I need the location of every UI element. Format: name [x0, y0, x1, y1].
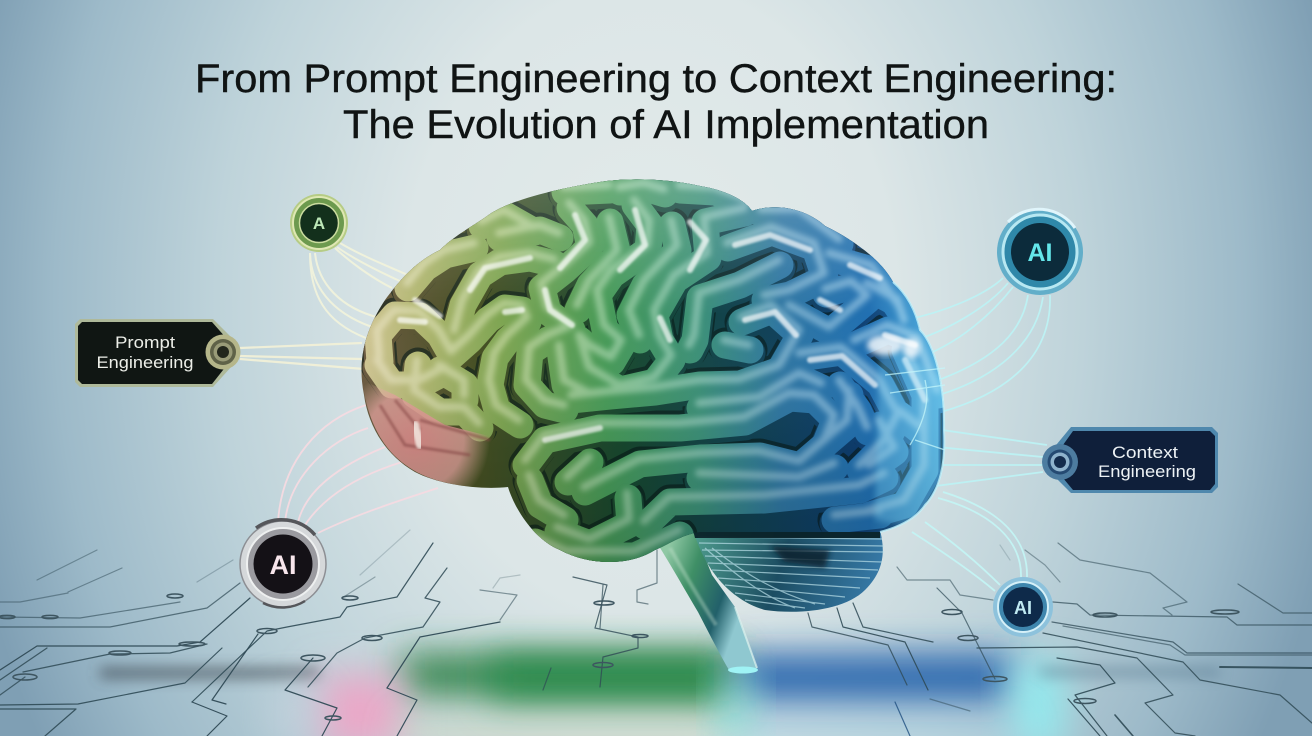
tag: Context Engineering: Context — [1112, 443, 1178, 462]
brain illustration — [350, 170, 960, 674]
cerebrum base — [350, 170, 960, 570]
connector lines: prompt tag — [240, 343, 364, 369]
pink temporal lobe — [364, 384, 488, 486]
connector lines: AI lower right — [912, 492, 1027, 591]
brain stem — [655, 533, 758, 674]
title: The Evolution of AI Implementation — [343, 103, 989, 147]
circuit nodes — [0, 594, 1239, 720]
connector lines: AI pink — [278, 405, 438, 533]
badge: AI pink — [240, 520, 326, 608]
badge: AI lower right: AI — [1014, 598, 1032, 618]
title: From Prompt Engineering to Context Engineering: — [195, 57, 1117, 101]
brain outline glow — [880, 282, 944, 532]
badge: AI pink: AI — [270, 550, 296, 580]
circuit traces — [0, 530, 1312, 736]
tag connector — [206, 334, 240, 370]
badge: AI lower right — [993, 577, 1053, 637]
tag: Prompt Engineering: Engineering — [96, 353, 194, 372]
badge: AI top right — [997, 209, 1083, 295]
tag: Prompt Engineering — [75, 319, 240, 387]
title — [195, 57, 1117, 147]
connector lines: A badge — [310, 243, 410, 338]
floor colour reflections — [100, 655, 1220, 736]
connector lines: AI top right — [905, 278, 1050, 415]
connector lines: context tag — [900, 424, 1047, 490]
lines over blue lobe — [885, 368, 945, 450]
tag: Context Engineering: Engineering — [1098, 462, 1196, 481]
tag connector — [1042, 444, 1078, 480]
cerebellum — [693, 530, 884, 612]
badge: A: A — [313, 214, 325, 233]
specular highlights — [400, 210, 925, 440]
tag: Context Engineering — [1042, 427, 1218, 493]
badge: A — [290, 194, 348, 252]
tag: Prompt Engineering: Prompt — [115, 333, 175, 352]
badge: AI top right: AI — [1028, 239, 1052, 267]
